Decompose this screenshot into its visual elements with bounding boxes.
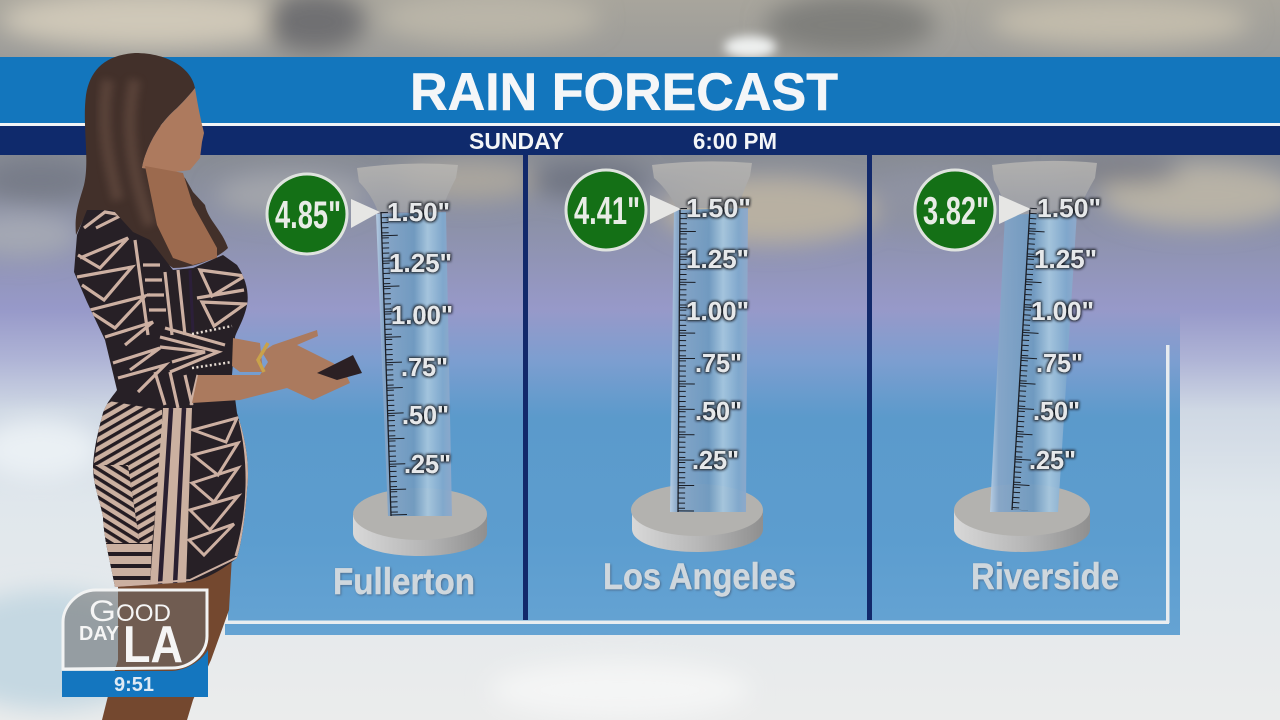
header band — [0, 57, 1280, 155]
gauge scale labels: .75" — [695, 348, 742, 378]
time label: 6:00 PM — [693, 128, 777, 154]
logo wordmark: G — [89, 595, 116, 628]
dress — [70, 205, 255, 595]
pointer — [351, 199, 380, 228]
gauge tube — [670, 208, 748, 512]
sleeve pattern — [77, 212, 245, 408]
gauge scale labels: 1.25" — [389, 248, 452, 278]
gauge scale labels: .50" — [402, 400, 449, 430]
face — [142, 88, 204, 172]
logo wordmark: LA — [123, 616, 183, 674]
rainfall badge — [566, 170, 646, 250]
city label: Fullerton — [333, 561, 475, 602]
gauge base — [954, 484, 1090, 552]
gauge scale labels: .25" — [692, 445, 739, 475]
gauge scale labels: 1.50" — [686, 193, 751, 223]
gauge base — [631, 484, 763, 552]
gauge funnel — [357, 164, 458, 212]
title: RAIN FORECAST — [410, 63, 838, 122]
legs — [102, 555, 232, 720]
city label: Riverside — [971, 556, 1119, 597]
column dividers — [523, 155, 872, 620]
rainfall badge: 3.82" — [923, 190, 989, 233]
rainfall badge: 4.41" — [574, 190, 640, 233]
rainfall badge — [915, 170, 995, 250]
skirt patterns — [93, 400, 162, 470]
gauge scale labels: .25" — [1029, 445, 1076, 475]
hair — [76, 53, 228, 268]
gauge ticks — [678, 208, 688, 512]
bracelet — [258, 343, 268, 372]
gauge scale labels: 1.50" — [1037, 193, 1101, 223]
gauge scale labels: .50" — [1033, 396, 1080, 426]
gauge scale labels: 1.00" — [686, 296, 749, 326]
gauge scale labels: 1.25" — [686, 244, 749, 274]
logo: Good Day LA — [62, 590, 208, 697]
gauge scale labels: .75" — [1036, 348, 1083, 378]
gauge scale labels — [1029, 193, 1101, 475]
time bar: 9:51 — [114, 674, 154, 696]
gauge ticks — [1012, 208, 1038, 510]
logo wordmark — [79, 595, 183, 674]
gauge scale labels: 1.00" — [391, 300, 453, 330]
rainfall badge: 4.85" — [275, 194, 341, 237]
gauge scale labels: 1.25" — [1034, 244, 1097, 274]
gauge scale labels: 1.00" — [1031, 296, 1094, 326]
city label: Los Angeles — [603, 556, 796, 597]
logo plate — [63, 590, 207, 669]
gauge scale labels — [686, 193, 751, 475]
gauge: Riverside — [915, 161, 1119, 597]
gauge scale labels: 1.50" — [387, 197, 450, 227]
logo wordmark: DAY — [79, 623, 120, 645]
gauge scale labels: .75" — [401, 352, 448, 382]
rainfall badge — [267, 174, 347, 254]
forearms and hands — [192, 330, 350, 403]
day label: SUNDAY — [469, 128, 564, 154]
panel: forecast area — [224, 155, 1180, 635]
neck and chest — [145, 166, 217, 265]
gauge scale labels — [387, 197, 453, 479]
gauge funnel — [652, 161, 752, 208]
gauge tube — [990, 212, 1077, 512]
presenter — [70, 53, 362, 720]
gauge scale labels: .25" — [404, 449, 451, 479]
time bar — [62, 650, 208, 697]
gauge ticks — [381, 212, 399, 516]
gauge scale labels: .50" — [695, 396, 742, 426]
gauge base — [353, 488, 487, 556]
pointer — [650, 195, 681, 224]
gauge: Fullerton — [267, 164, 487, 602]
gauge funnel — [992, 161, 1097, 215]
clicker — [317, 355, 362, 380]
pointer — [999, 195, 1031, 224]
logo wordmark: OOD — [116, 600, 171, 627]
gauge: Los Angeles — [566, 161, 796, 597]
gauge tube — [376, 212, 452, 516]
